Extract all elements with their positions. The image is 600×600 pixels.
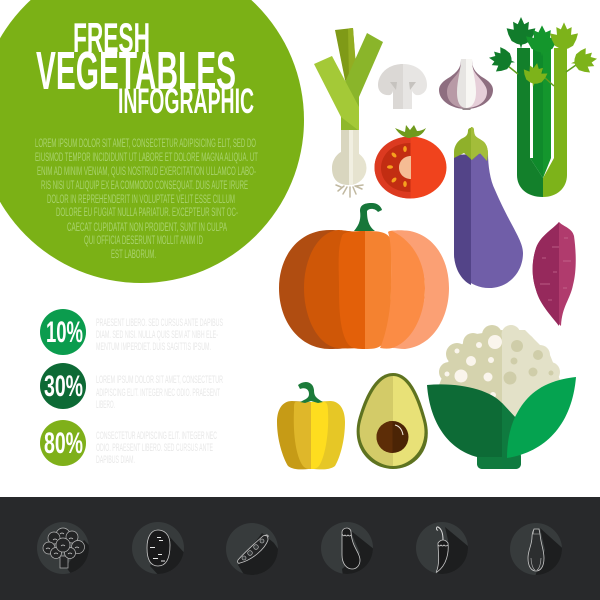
intro text block: RIS NISI UT ALIQUIP EX EA COMMODO CONSEQUAT. DUIS AUTE IRURE xyxy=(41,180,248,192)
intro text block xyxy=(35,138,258,261)
panel: dark footer band xyxy=(0,497,600,600)
stat: 80%: 80% xyxy=(44,427,83,460)
icon: bell pepper xyxy=(277,382,345,469)
title xyxy=(36,14,254,121)
intro text block: DOLOR IN REPREHENDERIT IN VOLUPTATE VELIT ESSE CILLUM xyxy=(47,194,235,206)
intro text block: EST LABORUM. xyxy=(111,249,156,261)
text: ADIPISCING ELIT. INTEGER NEC ODIO. PRAESENT xyxy=(96,387,220,399)
title: INFOGRAPHIC xyxy=(118,82,254,121)
intro text block: CAECAT CUPIDATAT NON PROIDENT, SUNT IN CULPA xyxy=(67,222,227,234)
intro text block: LOREM IPSUM DOLOR SIT AMET, CONSECTETUR ADIPISICING ELIT, SED DO xyxy=(35,138,256,150)
stat: 30%: 30% xyxy=(44,370,83,403)
icon: avocado xyxy=(357,373,428,469)
stat: 10%: DIAM. SED NISI. NULLA QUIS SEM AT NIBH ELE- xyxy=(96,329,218,341)
text: CONSECTETUR ADIPISCING ELIT. INTEGER NEC xyxy=(96,430,217,442)
title: FRESH xyxy=(73,14,150,61)
panel: green header circle xyxy=(0,0,304,283)
icon: eggplant xyxy=(454,127,523,288)
icon: tomato xyxy=(374,125,446,198)
icon: cauliflower xyxy=(427,325,576,469)
title: VEGETABLES xyxy=(36,41,236,101)
icon: pumpkin xyxy=(279,203,449,349)
icon: potato badge xyxy=(132,522,184,574)
icon: leek xyxy=(314,28,383,197)
stat: 30%: LIBERO. xyxy=(96,399,115,411)
intro text block: ENIM AD MINIM VENIAM, QUIS NOSTRUD EXERCITATION ULLAMCO LABO- xyxy=(37,166,256,178)
icon: eggplant badge xyxy=(321,522,373,574)
stat: 30% xyxy=(40,363,223,411)
icon: celery xyxy=(487,17,599,197)
icon: sweet potato xyxy=(533,222,576,326)
stat: 10% xyxy=(40,309,223,355)
stat: 10%: MENTUM IMPERDIET. DUIS SAGITTIS IPSUM. xyxy=(96,341,211,353)
icon: zucchini badge xyxy=(510,523,562,575)
stat: 80%: DAPIBUS DIAM. xyxy=(96,454,135,466)
intro text block: DOLORE EU FUGIAT NULLA PARIATUR. EXCEPTEUR SINT OC- xyxy=(56,207,238,219)
intro text block: EIUSMOD TEMPOR INCIDIDUNT UT LABORE ET DOLORE MAGNA ALIQUA. UT xyxy=(35,152,258,164)
text: PRAESENT LIBERO. SED CURSUS ANTE DAPIBUS xyxy=(96,317,223,329)
stat: 80% xyxy=(40,420,217,466)
icon: broccoli badge xyxy=(37,522,89,574)
text: ODIO. PRAESENT LIBERO. SED CURSUS ANTE xyxy=(96,442,213,454)
icon: chili badge xyxy=(416,522,468,574)
icon: pea pod badge xyxy=(226,523,278,575)
stat: 10%: 10% xyxy=(46,316,83,349)
icon: mushroom xyxy=(378,64,427,109)
icon: garlic xyxy=(439,59,493,110)
intro text block: QUI OFFICIA DESERUNT MOLLIT ANIM ID xyxy=(84,235,203,247)
text: LOREM IPSUM DOLOR SIT AMET, CONSECTETUR xyxy=(96,374,223,386)
